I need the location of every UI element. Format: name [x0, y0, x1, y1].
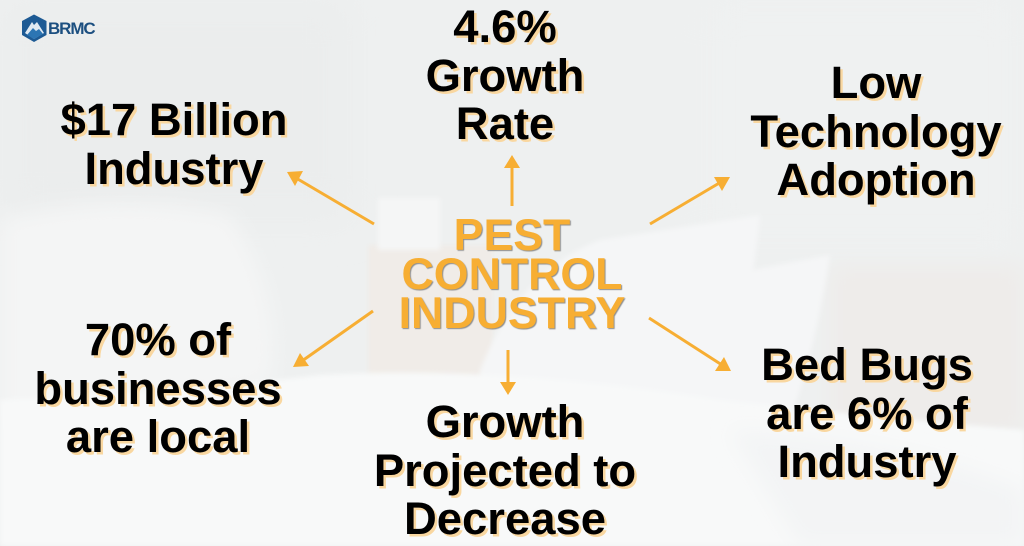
text: $17 Billion Industry: Industry — [84, 142, 264, 194]
arrow: to 70% local — [293, 311, 373, 367]
text: 4.6% Growth Rate: Rate — [456, 98, 554, 149]
text: Bed Bugs are 6% of Industry: are 6% of — [766, 388, 968, 438]
text: Low Technology Adoption: Low — [831, 57, 921, 108]
center title: Pest Control Industry: PEST — [454, 211, 570, 260]
text: 4.6% Growth Rate: Growth — [426, 50, 584, 100]
text: Growth Projected to Decrease: Growth — [426, 396, 584, 447]
center title: Pest Control Industry: INDUSTRY — [399, 289, 625, 338]
text: 4.6% Growth Rate — [426, 1, 584, 149]
arrow: to low technology — [650, 177, 730, 224]
text: 70% of businesses are local — [34, 314, 282, 462]
text: 70% of businesses are local: are local — [66, 411, 250, 462]
text: Growth Projected to Decrease — [374, 396, 637, 544]
arrow: to $17 billion — [287, 171, 374, 224]
arrow: to bed bugs — [649, 318, 731, 371]
center title: Pest Control Industry: CONTROL — [402, 250, 622, 299]
text: Growth Projected to Decrease: Projected to — [374, 444, 636, 496]
arrow: down to growth projected — [500, 350, 516, 395]
text: Low Technology Adoption: Technology — [750, 106, 1002, 156]
logo: BRMC: BRMC — [48, 19, 95, 38]
text: $17 Billion Industry: $17 Billion — [60, 94, 288, 145]
text: Bed Bugs are 6% of Industry — [761, 339, 974, 489]
text: 70% of businesses are local: businesses — [34, 362, 282, 414]
logo: BRMC — [22, 14, 96, 42]
text: $17 Billion Industry — [60, 94, 288, 196]
text: Growth Projected to Decrease: Decrease — [404, 493, 606, 544]
text: 4.6% Growth Rate: 4.6% — [453, 1, 557, 52]
text: Low Technology Adoption — [750, 57, 1004, 207]
text: Bed Bugs are 6% of Industry: Industry — [777, 436, 957, 487]
text: Bed Bugs are 6% of Industry: Bed Bugs — [761, 339, 973, 390]
text: Low Technology Adoption: Adoption — [776, 154, 976, 205]
text: 70% of businesses are local: 70% of — [85, 314, 231, 365]
arrow: up to growth rate — [504, 155, 520, 206]
center title: Pest Control Industry — [399, 211, 626, 338]
